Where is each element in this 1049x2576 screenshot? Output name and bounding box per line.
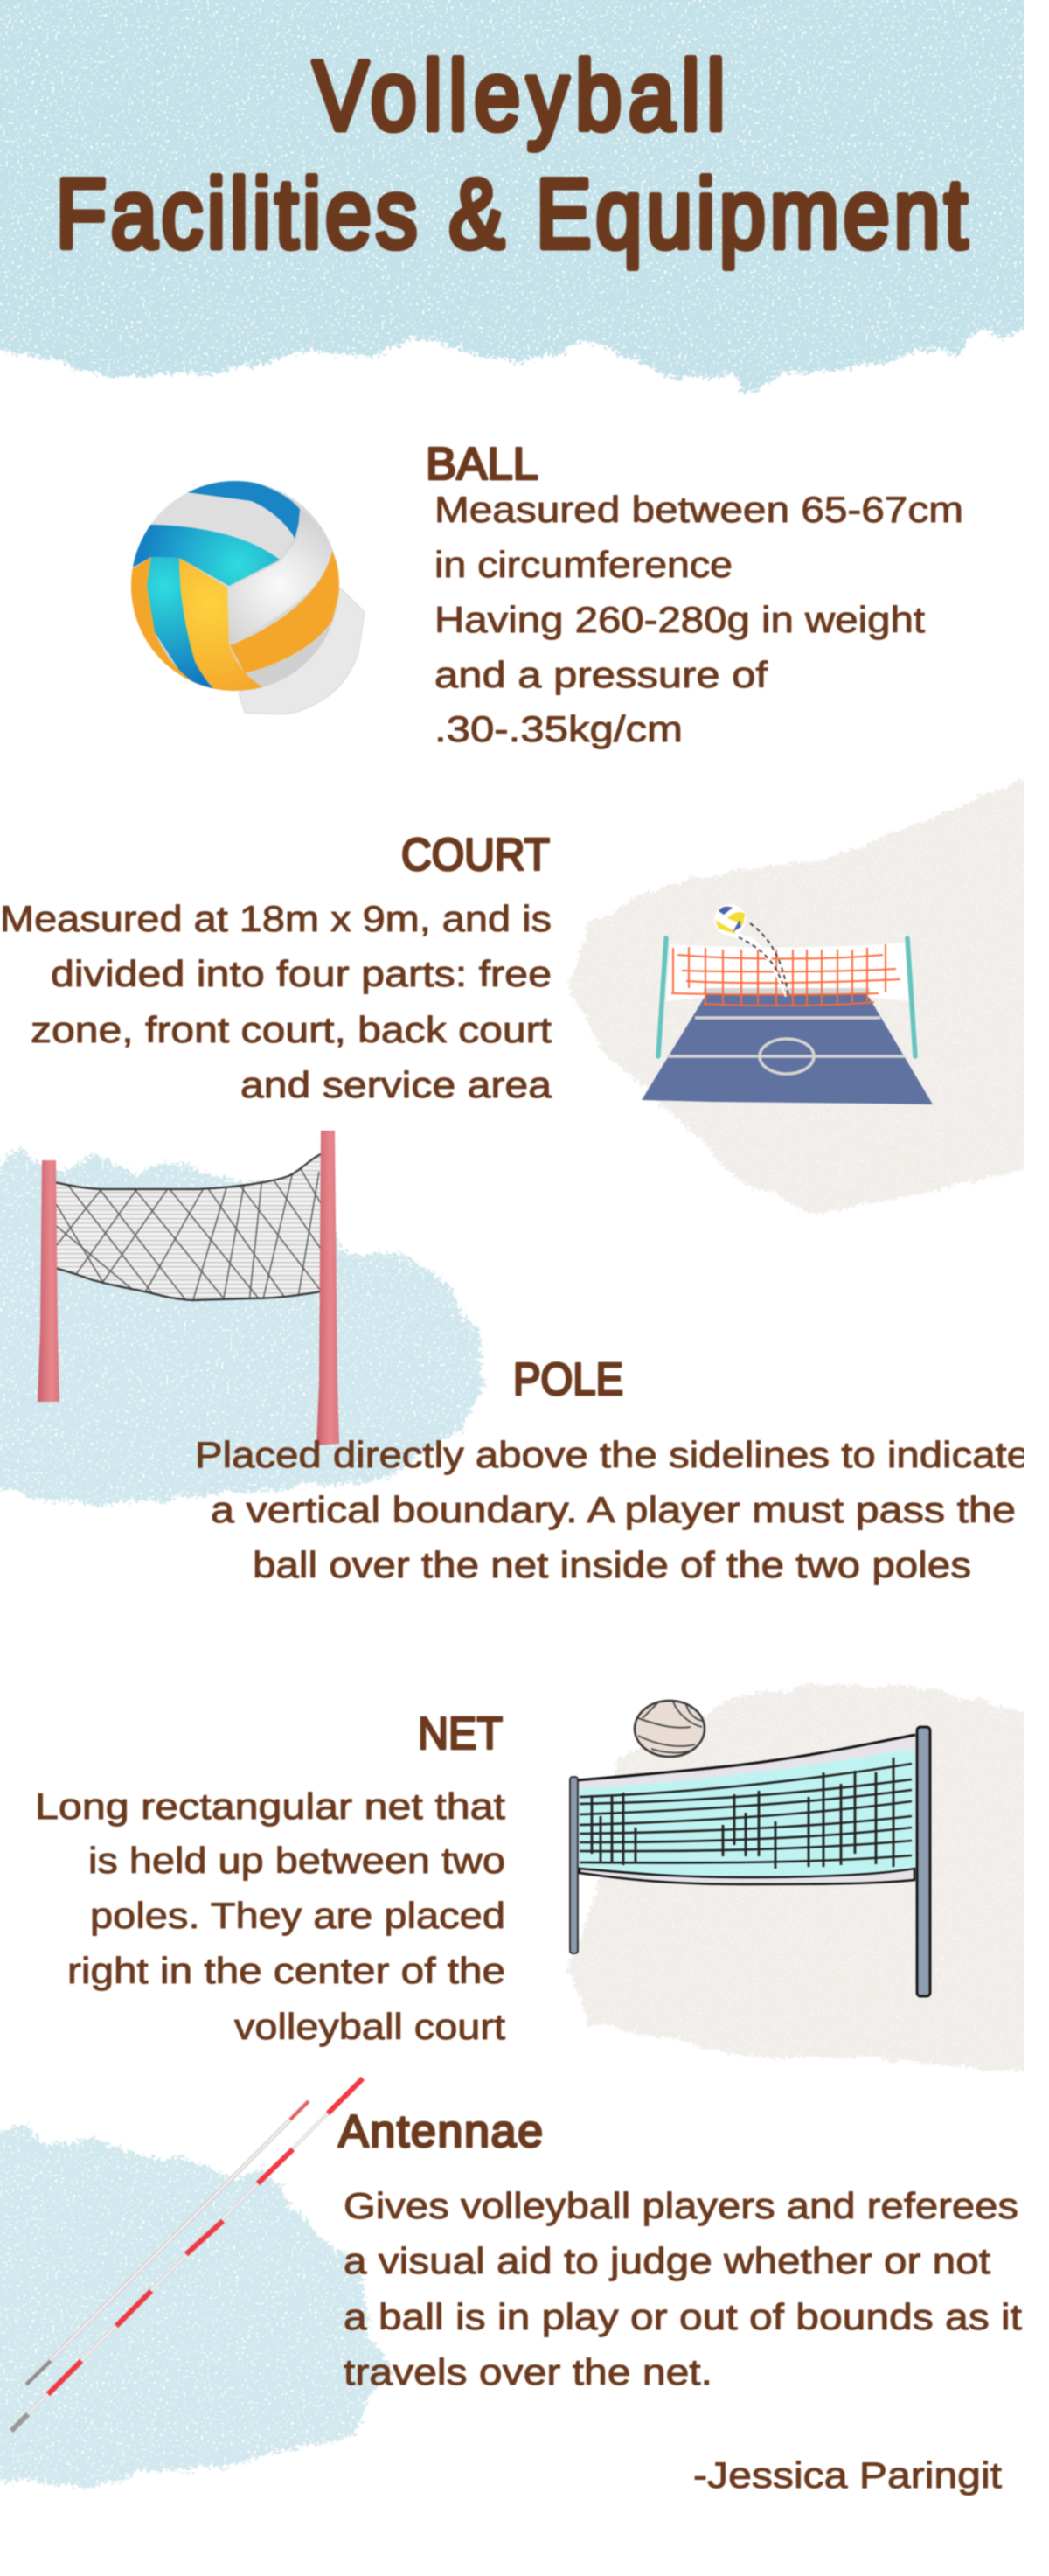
ball description: .30-.35kg/cm [434,708,683,749]
ball description: Having 260-280g in weight [434,599,925,640]
net description: poles. They are placed [90,1895,505,1936]
pole description: ball over the net inside of the two poles [253,1544,971,1585]
antennae description: a ball is in play or out of bounds as it [344,2296,1022,2337]
net description: Long rectangular net that [35,1786,505,1827]
section: net [35,1681,1049,2076]
right pole [316,1131,339,1445]
title [56,42,968,269]
antennae description: travels over the net. [344,2351,712,2392]
icon: antennae [11,2078,363,2431]
icon: court illustration [642,904,933,1104]
antennae description [344,2185,1022,2392]
pole description [195,1434,1030,1585]
antennae description: a visual aid to judge whether or not [344,2240,990,2281]
author credit: -Jessica Paringit [693,2454,1002,2496]
back antenna [26,2101,309,2385]
net ball [635,1701,705,1757]
heading: court: COURT [401,830,550,881]
heading: pole: POLE [513,1354,623,1405]
front antenna [11,2078,363,2431]
net description: is held up between two [88,1840,505,1881]
title: Volleyball [313,42,726,151]
sagging net [55,1152,322,1303]
right post [917,1727,930,1996]
court floor [642,994,933,1104]
net background blob [568,1681,1049,2076]
court background blob [568,774,1049,1214]
net description: right in the center of the [67,1950,505,1991]
section: court [0,774,1049,1214]
court description: zone, front court, back court [31,1009,552,1050]
court net [658,938,915,1056]
section: ball [122,439,963,749]
ball description [434,489,963,749]
section: antennae [0,2078,1022,2496]
ball description: Measured between 65-67cm [434,489,963,530]
ball description: and a pressure of [434,654,768,695]
court description: Measured at 18m x 9m, and is [0,898,552,939]
pole description: a vertical boundary. A player must pass the [211,1489,1016,1530]
icon: net on poles [38,1131,339,1445]
left pole [38,1160,59,1402]
net description: volleyball court [234,2006,505,2047]
heading: net: NET [418,1709,503,1759]
title: Facilities & Equipment [56,160,968,269]
pole background blob [0,1147,482,1505]
court description: divided into four parts: free [51,953,552,994]
antennae background blob [0,2125,389,2489]
header banner background [0,0,1049,392]
small ball with trail [714,904,788,997]
court description: and service area [240,1064,552,1105]
left post [570,1777,578,1953]
ball description: in circumference [434,544,733,585]
heading: antennae: Antennae [338,2106,543,2157]
icon: volleyball [122,472,365,714]
section: pole [0,1131,1030,1585]
pole description: Placed directly above the sidelines to indicate [195,1434,1030,1475]
net description [35,1786,505,2047]
court description [0,898,552,1105]
antennae description: Gives volleyball players and referees [344,2185,1018,2226]
icon: net illustration [570,1701,930,1996]
heading: ball: BALL [426,439,538,490]
net mesh [577,1735,915,1884]
